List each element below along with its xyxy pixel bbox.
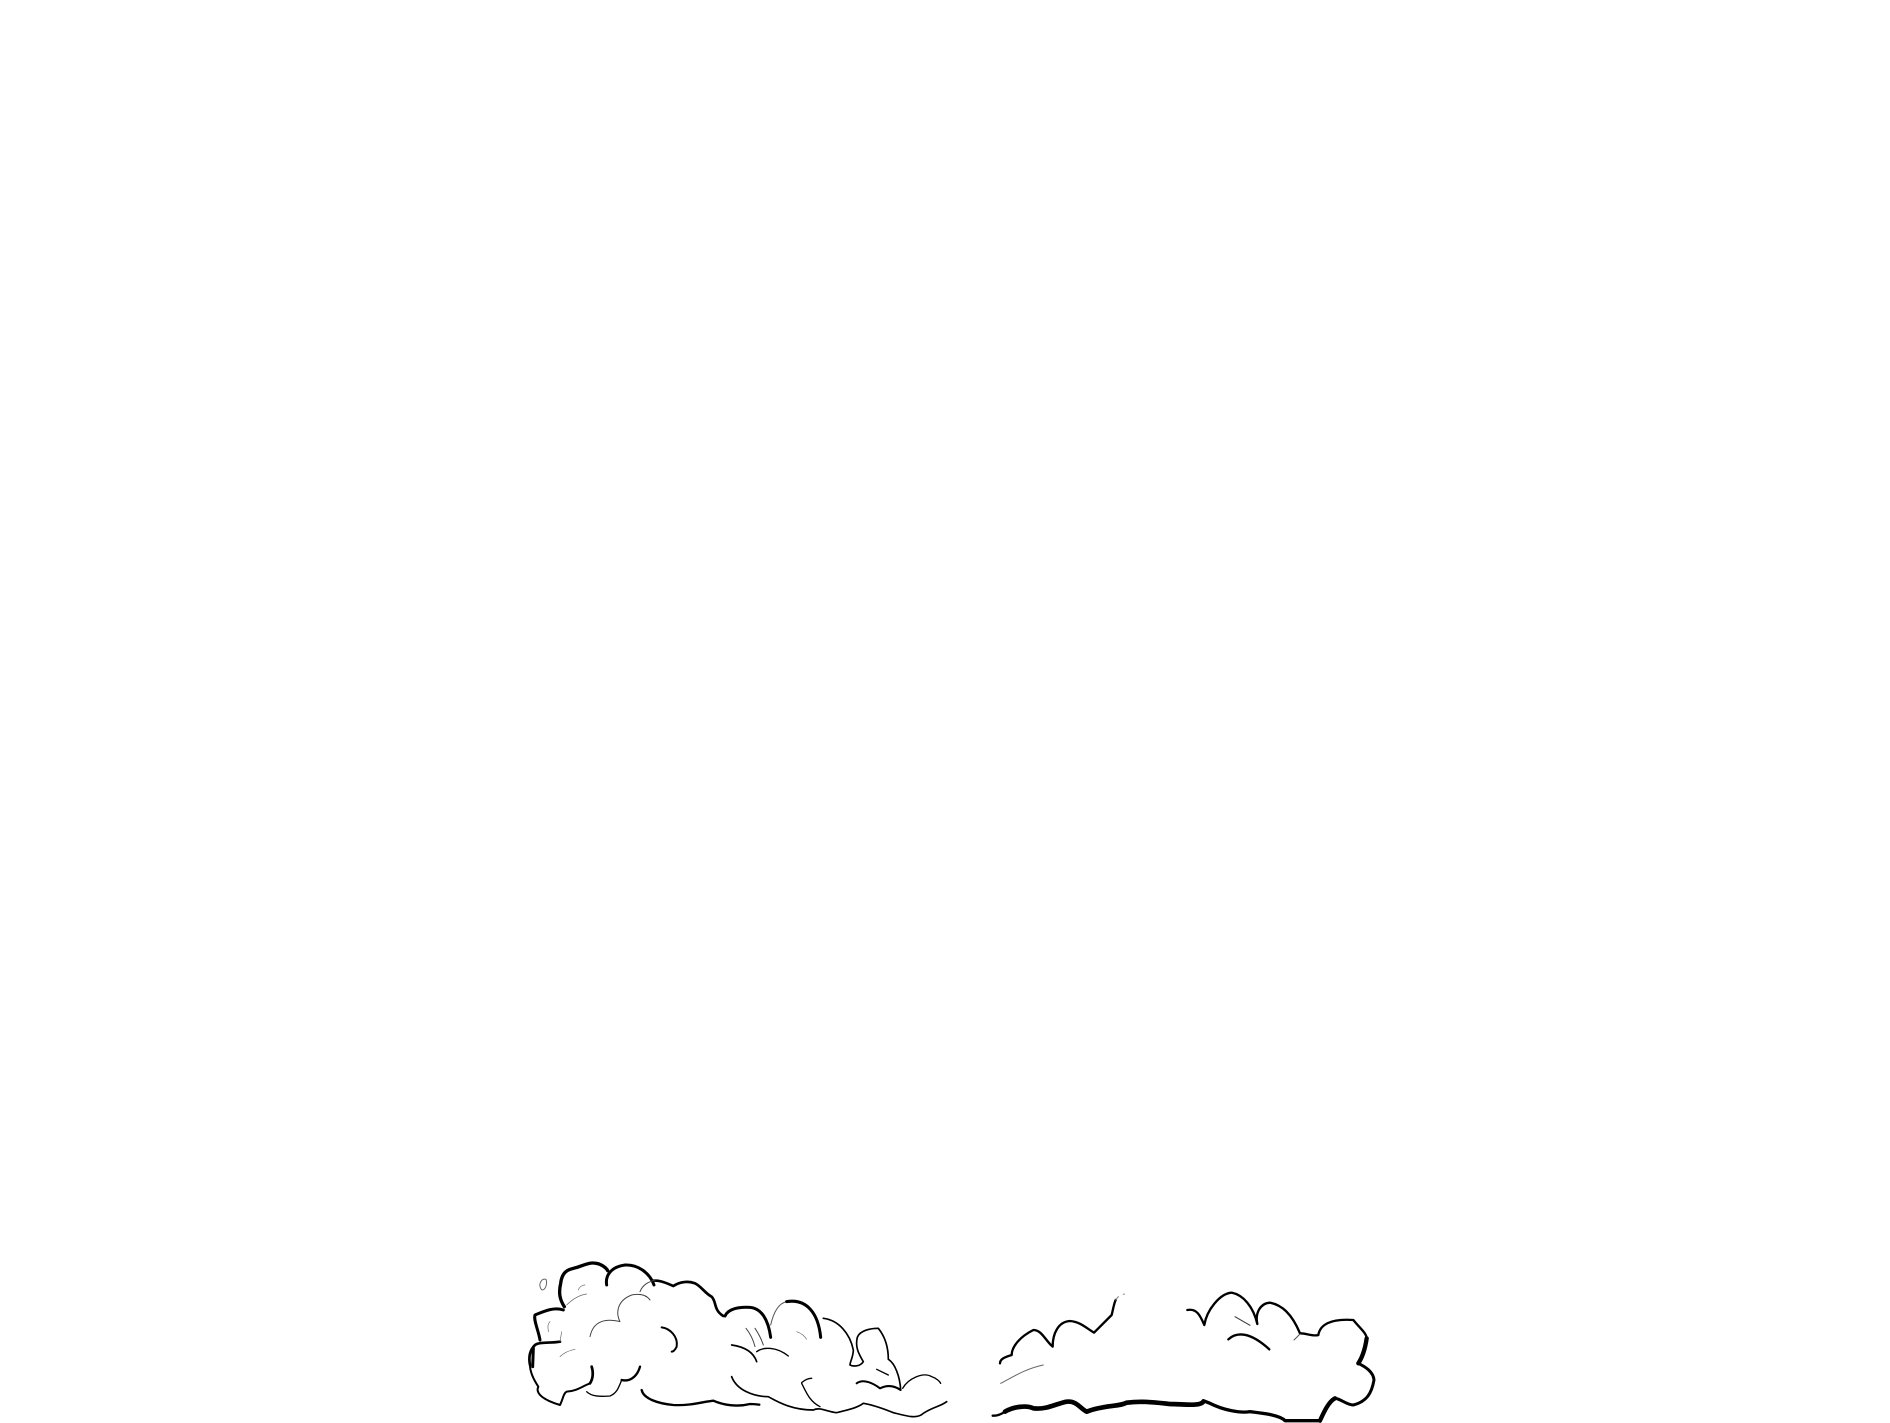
icon: left cloud outline xyxy=(529,1263,947,1417)
icon: right cloud outline xyxy=(993,1293,1374,1421)
